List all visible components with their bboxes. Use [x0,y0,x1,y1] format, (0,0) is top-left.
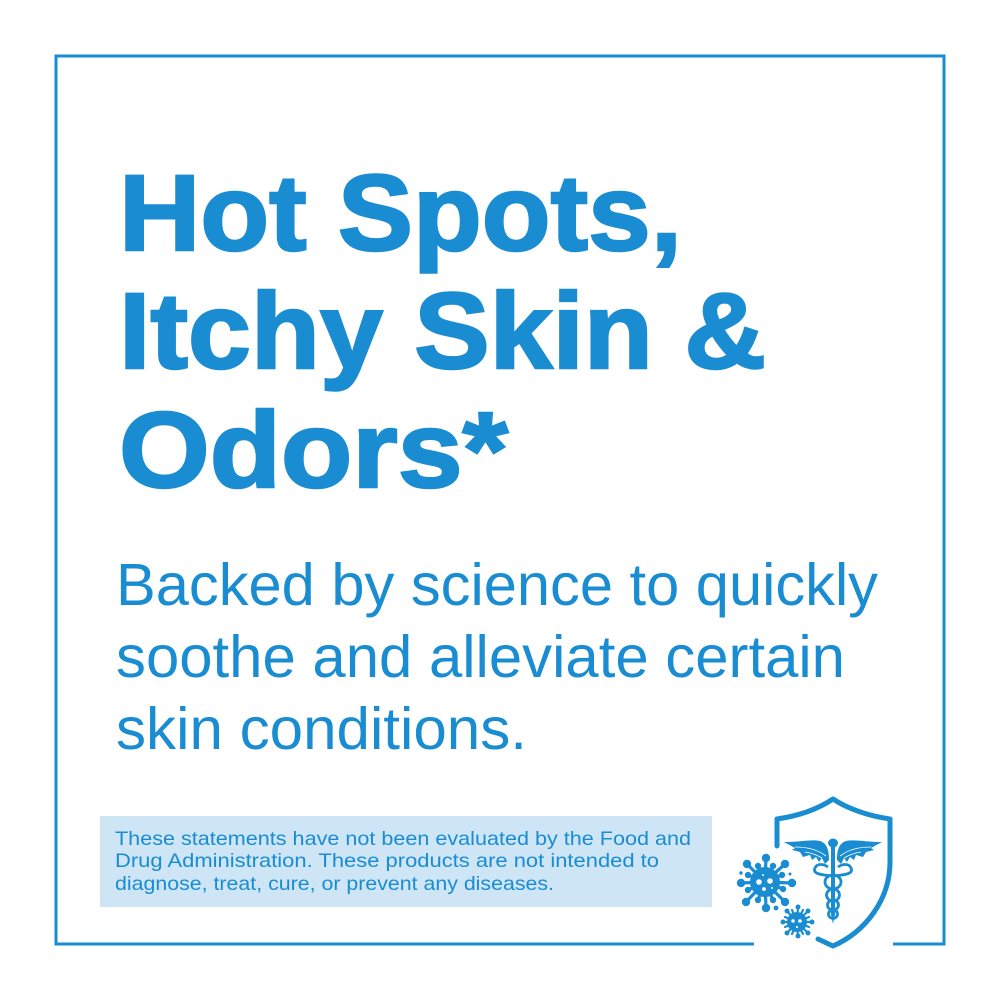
title [119,152,766,510]
icon: caduceus [784,838,882,924]
icon: small virus [780,904,814,938]
icon: shield outline [777,799,890,946]
disclaimer box [100,816,712,907]
subtitle text block: Backed by science to quickly [116,552,878,618]
subtitle text block [116,552,878,762]
disclaimer box: Drug Administration. These products are not intended to [115,850,659,872]
disclaimer box: diagnose, treat, cure, or prevent any diseases. [115,873,554,895]
disclaimer box: These statements have not been evaluated by the Food and [115,828,691,850]
title: Odors* [119,389,508,510]
title: Hot Spots, [119,152,682,273]
icon: large virus [737,854,796,912]
subtitle text block: soothe and alleviate certain [116,624,845,690]
icon: shield with caduceus and viruses [737,799,890,946]
subtitle text block: skin conditions. [116,696,527,762]
title: Itchy Skin & [119,270,766,391]
page frame [56,56,944,944]
